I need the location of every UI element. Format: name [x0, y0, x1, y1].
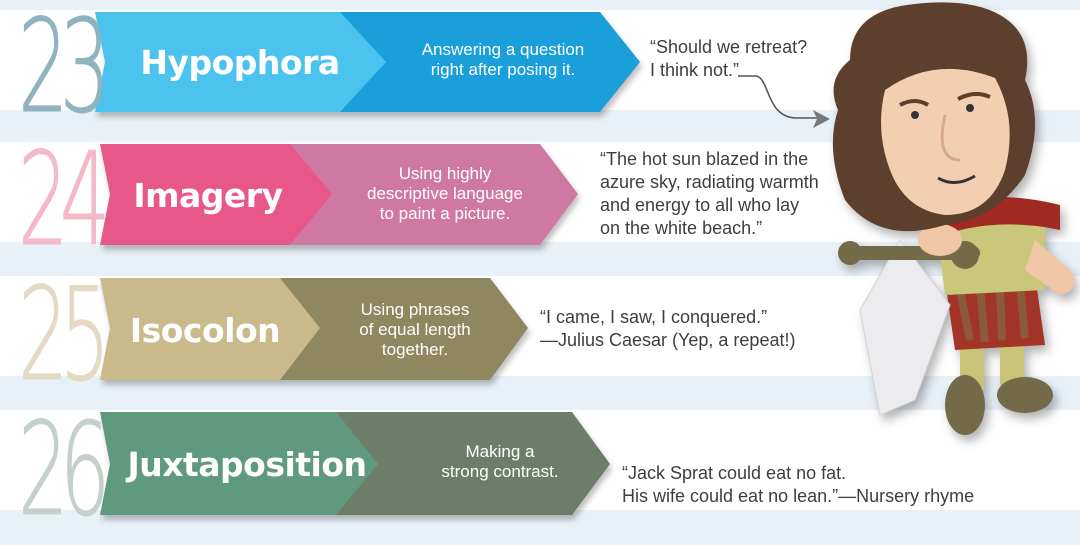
arrow: Imagery: [100, 144, 582, 253]
cape: [915, 197, 1060, 240]
description: [441, 442, 559, 481]
description: [359, 300, 471, 359]
quote: His wife could eat no lean.”—Nursery rhyme: [622, 486, 974, 506]
icon: curved arrow: [738, 75, 830, 128]
quote: and energy to all who lay: [600, 195, 799, 215]
description: right after posing it.: [431, 60, 575, 79]
skirt: [945, 275, 1045, 350]
legs and boots: [945, 325, 1053, 435]
number 26: 26: [18, 396, 102, 545]
term: Imagery: [133, 176, 283, 215]
hair: [833, 2, 1035, 231]
torso: [935, 205, 1045, 295]
quote: [650, 37, 807, 80]
arrow: Hypophora: [95, 12, 644, 120]
quote: “The hot sun blazed in the: [600, 149, 808, 169]
number 24: 24: [18, 126, 102, 275]
quote: “I came, I saw, I conquered.”: [540, 307, 767, 327]
quote: “Should we retreat?: [650, 37, 807, 57]
quote: [540, 307, 795, 350]
description: Using highly: [399, 164, 491, 183]
description: [367, 164, 523, 223]
quote: I think not.”: [650, 60, 739, 80]
description: strong contrast.: [441, 462, 559, 481]
row 23: Hypophora: [18, 0, 807, 142]
quote: —Julius Caesar (Yep, a repeat!): [540, 330, 795, 350]
term: Juxtaposition: [127, 445, 367, 484]
description: Making a: [466, 442, 534, 461]
row 26: Juxtaposition: [18, 396, 974, 545]
face: [881, 69, 1010, 215]
hand: [918, 224, 962, 256]
term: Isocolon: [130, 311, 280, 350]
number 25: 25: [18, 261, 102, 410]
description: Using phrases: [361, 300, 469, 319]
row 24: Imagery: [18, 126, 819, 275]
quote: [600, 149, 819, 238]
description: to paint a picture.: [380, 204, 510, 223]
description: together.: [382, 340, 448, 359]
quote: [622, 463, 974, 506]
quote: on the white beach.”: [600, 218, 762, 238]
description: Answering a question: [422, 40, 584, 59]
description: descriptive language: [367, 184, 523, 203]
sword: [838, 240, 980, 415]
arrow: Juxtaposition: [100, 412, 614, 523]
right arm: [1025, 240, 1074, 295]
description: of equal length: [359, 320, 471, 339]
quote: azure sky, radiating warmth: [600, 172, 819, 192]
row 25: Isocolon: [18, 261, 795, 410]
description: [422, 40, 584, 79]
quote: “Jack Sprat could eat no fat.: [622, 463, 846, 483]
character illustration: Roman soldier: [831, 2, 1080, 446]
arrow: Isocolon: [100, 278, 532, 388]
term: Hypophora: [140, 43, 340, 82]
